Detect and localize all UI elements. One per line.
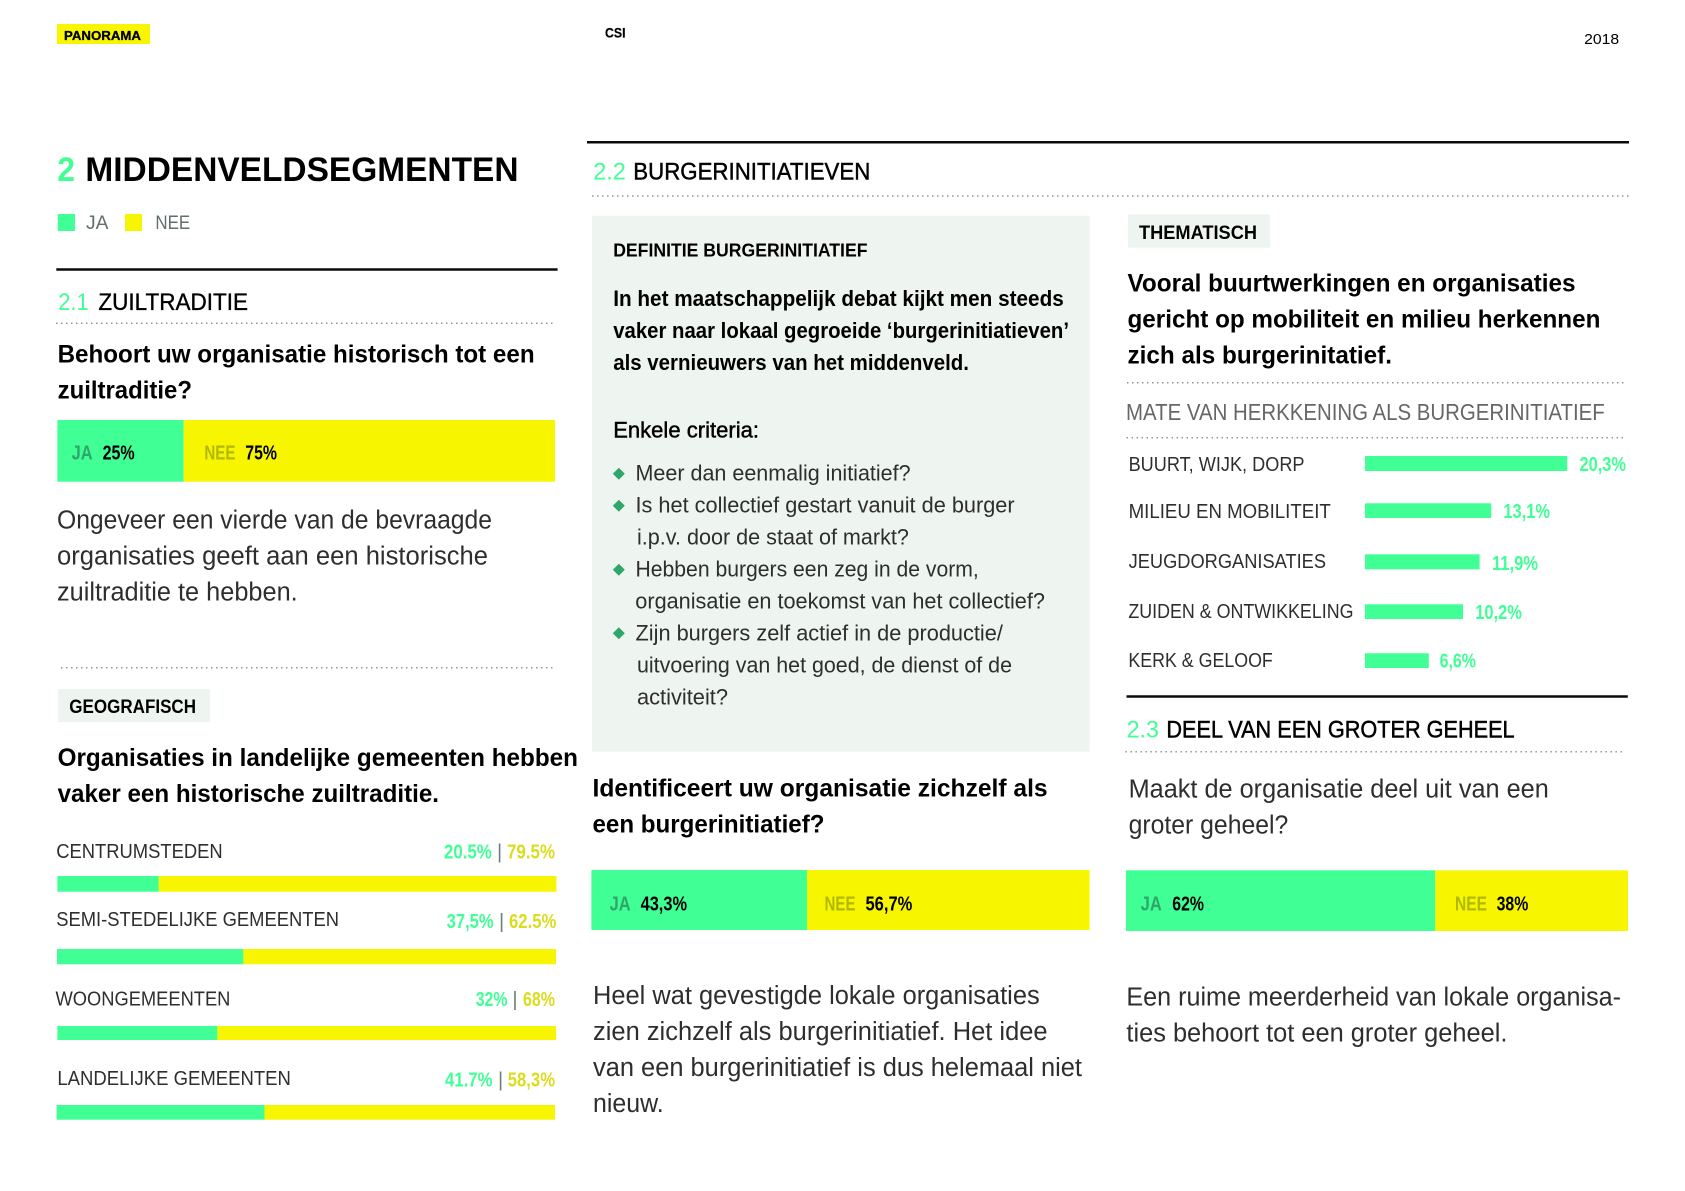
panel intro text — [613, 286, 1069, 375]
bar: milieu en mobiliteit — [1129, 501, 1550, 523]
question: burgerinitiatief: Identificeert uw organisatie zichzelf als — [592, 775, 1048, 803]
panel intro text: als vernieuwers van het middenveld. — [613, 350, 969, 375]
stacked bar: groter geheel 62 / 38: 62% — [1172, 894, 1204, 916]
bar: buurt, wijk, dorp: 20,3% — [1580, 454, 1626, 476]
bar row: semi-stedelijke gemeenten: 62.5% — [509, 911, 557, 933]
bar row: woongemeenten — [56, 989, 556, 1040]
question: groter geheel: groter geheel? — [1129, 812, 1288, 840]
bar row: woongemeenten: 68% — [523, 989, 555, 1011]
section heading 2.2: 2.2 — [593, 159, 626, 186]
stacked bar: zuiltraditie 25 / 75: JA — [72, 442, 93, 464]
bar: jeugdorganisaties — [1129, 551, 1538, 575]
question: burgerinitiatief: een burgerinitiatief? — [592, 811, 824, 839]
body text: burgerinitiatief — [593, 982, 1082, 1118]
question: zuiltraditie: Behoort uw organisatie historisch tot een — [58, 341, 535, 369]
section heading 2.1: ZUILTRADITIE — [98, 289, 248, 316]
stacked bar: zuiltraditie 25 / 75 — [57, 420, 555, 482]
bar row: centrumsteden: CENTRUMSTEDEN — [56, 841, 223, 863]
header year: 2018 — [1584, 32, 1619, 48]
question: groter geheel: Maakt de organisatie deel uit van een — [1129, 776, 1549, 804]
body text: burgerinitiatief: nieuw. — [593, 1090, 664, 1118]
body text: groter geheel: Een ruime meerderheid van lokale organisa- — [1126, 983, 1621, 1011]
criteria list: Meer dan eenmalig initiatief? — [636, 461, 911, 486]
bar row: landelijke gemeenten: LANDELIJKE GEMEENTEN — [57, 1068, 291, 1090]
body text: zuiltraditie: zuiltraditie te hebben. — [57, 578, 298, 606]
bar: zuiden en ontwikkeling — [1128, 601, 1522, 624]
bar row: centrumsteden: 20.5% — [444, 841, 492, 863]
legend — [58, 213, 190, 234]
bar row: semi-stedelijke gemeenten — [56, 909, 557, 964]
legend: JA — [86, 213, 109, 234]
heading: geografisch finding: vaker een historische zuiltraditie. — [58, 780, 439, 808]
section heading 2.3: DEEL VAN EEN GROTER GEHEEL — [1166, 717, 1515, 744]
stacked bar: burgerinitiatief 43,3 / 56,7 — [591, 870, 1090, 930]
section heading 2.1: 2.1 — [58, 289, 89, 316]
stacked bar: zuiltraditie 25 / 75: 25% — [103, 442, 135, 464]
bar row: centrumsteden: | — [497, 841, 502, 863]
criteria list: organisatie en toekomst van het collectief? — [635, 589, 1045, 614]
tag: Thematisch: THEMATISCH — [1139, 223, 1257, 244]
stacked bar: groter geheel 62 / 38 — [1126, 870, 1628, 931]
heading: thematisch finding: zich als burgerinitatief. — [1128, 342, 1392, 370]
stacked bar: groter geheel 62 / 38: 38% — [1497, 894, 1528, 916]
body text: zuiltraditie: Ongeveer een vierde van de bevraagde — [57, 506, 492, 534]
question: zuiltraditie: zuiltraditie? — [58, 376, 192, 404]
criteria list: uitvoering van het goed, de dienst of de — [637, 653, 1012, 678]
bar row: landelijke gemeenten — [57, 1068, 555, 1120]
bar row: woongemeenten: WOONGEMEENTEN — [56, 989, 230, 1011]
chart title: mate van herkenning: MATE VAN HERKKENING ALS BURGERINITIATIEF — [1126, 399, 1605, 425]
question: burgerinitiatief — [592, 775, 1048, 839]
bar: zuiden en ontwikkeling: 10,2% — [1475, 602, 1522, 624]
panel: definitie burgerinitiatief — [592, 216, 1090, 752]
legend: NEE — [155, 213, 190, 234]
body text: groter geheel: ties behoort tot een groter geheel. — [1126, 1019, 1507, 1047]
bar row: semi-stedelijke gemeenten: 37,5% — [447, 911, 494, 933]
criteria list: Hebben burgers een zeg in de vorm, — [636, 557, 979, 582]
bar row: semi-stedelijke gemeenten: | — [499, 911, 504, 933]
stacked bar: burgerinitiatief 43,3 / 56,7: NEE — [824, 894, 856, 916]
main title: MIDDENVELDSEGMENTEN — [85, 151, 519, 189]
tag: Thematisch — [1128, 214, 1270, 248]
bar row: centrumsteden — [56, 841, 556, 892]
heading: thematisch finding: gericht op mobiliteit en milieu herkennen — [1128, 306, 1600, 334]
stacked bar: zuiltraditie 25 / 75: NEE — [204, 442, 235, 464]
bar row: centrumsteden: 79.5% — [507, 841, 555, 863]
bar: zuiden en ontwikkeling: ZUIDEN & ONTWIKKELING — [1128, 601, 1354, 623]
stacked bar: zuiltraditie 25 / 75: 75% — [245, 442, 277, 464]
stacked bar: burgerinitiatief 43,3 / 56,7: JA — [610, 894, 631, 916]
body text: groter geheel — [1126, 983, 1621, 1047]
bar: kerk en geloof: 6,6% — [1440, 650, 1476, 672]
stacked bar: groter geheel 62 / 38: JA — [1141, 894, 1162, 916]
section heading 2.2: BURGERINITIATIEVEN — [633, 159, 870, 186]
bar row: landelijke gemeenten: | — [498, 1070, 503, 1092]
criteria list: Is het collectief gestart vanuit de burger — [636, 493, 1015, 518]
heading: thematisch finding: Vooral buurtwerkingen en organisaties — [1128, 270, 1576, 298]
heading: geografisch finding — [58, 744, 578, 808]
bar chart: herkenning als burgerinitiatief — [1128, 454, 1626, 672]
body text: zuiltraditie: organisaties geeft aan een historische — [57, 542, 488, 570]
stacked bar: burgerinitiatief 43,3 / 56,7: 43,3% — [641, 894, 687, 916]
question: groter geheel — [1129, 776, 1549, 840]
bar row: semi-stedelijke gemeenten: SEMI-STEDELIJKE GEMEENTEN — [56, 909, 339, 931]
criteria list: activiteit? — [637, 685, 728, 710]
heading: thematisch finding — [1128, 270, 1600, 370]
bar: jeugdorganisaties: JEUGDORGANISATIES — [1129, 551, 1326, 573]
header label: CSI: CSI — [605, 26, 626, 41]
body text: burgerinitiatief: zien zichzelf als burgerinitiatief. Het idee — [593, 1018, 1048, 1046]
bar row: woongemeenten: 32% — [476, 989, 508, 1011]
body text: burgerinitiatief: Heel wat gevestigde lokale organisaties — [593, 982, 1040, 1010]
bar row: landelijke gemeenten: 58,3% — [508, 1070, 555, 1092]
tag: Geografisch: GEOGRAFISCH — [69, 697, 196, 718]
stacked bar: groter geheel 62 / 38: NEE — [1455, 894, 1487, 916]
criteria list: Zijn burgers zelf actief in de productie/ — [636, 621, 1004, 646]
stacked bar: burgerinitiatief 43,3 / 56,7: 56,7% — [866, 894, 912, 916]
body text: zuiltraditie — [57, 506, 492, 606]
bar row: woongemeenten: | — [512, 989, 518, 1011]
bar: jeugdorganisaties: 11,9% — [1492, 553, 1538, 575]
question: zuiltraditie — [58, 341, 535, 404]
panel intro text: In het maatschappelijk debat kijkt men steeds — [613, 286, 1064, 311]
body text: burgerinitiatief: van een burgerinitiatief is dus helemaal niet — [593, 1054, 1082, 1082]
panel heading: DEFINITIE BURGERINITIATIEF — [613, 241, 868, 261]
heading: geografisch finding: Organisaties in landelijke gemeenten hebben — [58, 744, 578, 772]
bar: milieu en mobiliteit: 13,1% — [1503, 501, 1550, 523]
bar: kerk en geloof — [1128, 650, 1476, 672]
criteria heading: Enkele criteria: — [613, 417, 759, 442]
bar: buurt, wijk, dorp — [1129, 454, 1626, 476]
bar: kerk en geloof: KERK & GELOOF — [1128, 650, 1273, 672]
bar row: landelijke gemeenten: 41.7% — [445, 1070, 493, 1092]
section heading 2.3: 2.3 — [1127, 717, 1159, 744]
header tag: Panorama — [57, 24, 150, 44]
panel intro text: vaker naar lokaal gegroeide ‘burgerinitiatieven’ — [613, 318, 1069, 343]
criteria list: i.p.v. door de staat of markt? — [637, 525, 909, 550]
tag: Geografisch — [58, 689, 210, 722]
bar: milieu en mobiliteit: MILIEU EN MOBILITEIT — [1129, 501, 1331, 523]
main title: 2 — [57, 151, 75, 189]
criteria list — [613, 461, 1045, 710]
bar: buurt, wijk, dorp: BUURT, WIJK, DORP — [1129, 454, 1304, 476]
header tag: Panorama: PANORAMA — [64, 28, 142, 43]
